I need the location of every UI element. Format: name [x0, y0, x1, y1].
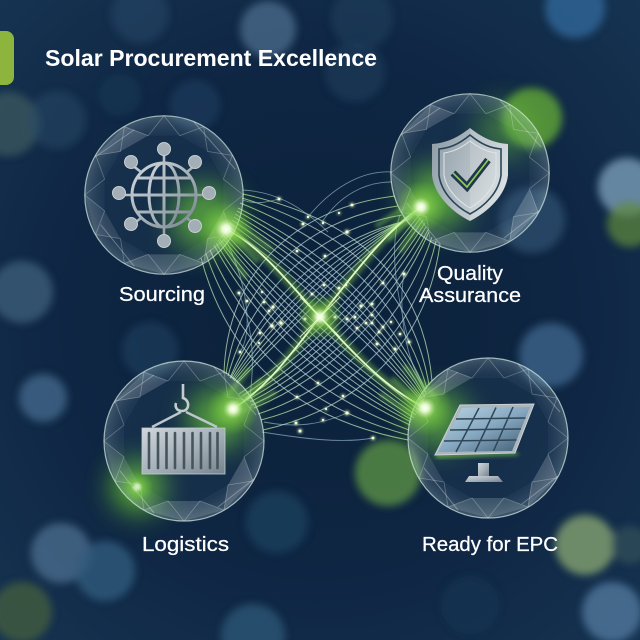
icon: shield with check	[432, 128, 508, 221]
label: ready for EPC: Ready for EPC	[422, 534, 558, 556]
sphere: ready for EPC	[408, 358, 568, 518]
icon: global network	[112, 142, 216, 248]
icon: solar panel	[435, 404, 534, 482]
header accent tab	[0, 31, 14, 85]
sphere: logistics	[104, 361, 264, 521]
sphere: quality assurance	[391, 94, 549, 252]
icon: shipping container on hook	[142, 384, 225, 474]
title: Solar Procurement Excellence	[45, 45, 377, 71]
node flares	[121, 181, 453, 503]
light particles	[238, 198, 410, 439]
fiber network	[201, 172, 440, 440]
label: quality assurance: Quality	[437, 263, 503, 285]
label: logistics: Logistics	[142, 534, 229, 556]
label: quality assurance: Assurance	[419, 285, 521, 307]
label: sourcing: Sourcing	[119, 284, 205, 306]
central light flare	[296, 293, 344, 341]
sphere: sourcing	[85, 116, 243, 274]
